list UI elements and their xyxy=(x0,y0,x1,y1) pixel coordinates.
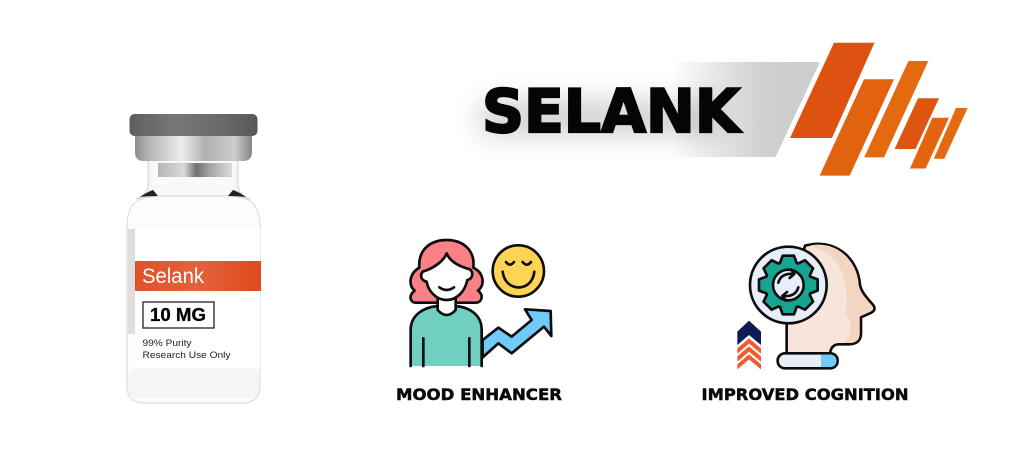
gear xyxy=(759,256,818,314)
vial dark cap xyxy=(130,114,258,136)
vial orange band xyxy=(135,261,261,291)
smile xyxy=(439,287,454,290)
neck xyxy=(438,298,456,315)
vial: Selank 10 MG xyxy=(127,114,261,403)
base collar xyxy=(778,353,838,368)
vial dose box: 10 MG xyxy=(150,305,206,325)
label: improved cognition: IMPROVED COGNITION xyxy=(702,385,908,404)
icon: head with gear and up chevrons xyxy=(737,244,875,369)
head xyxy=(787,244,875,356)
face xyxy=(421,253,472,300)
title banner xyxy=(480,62,820,157)
smiley xyxy=(493,245,544,297)
chevrons xyxy=(737,321,761,369)
hair xyxy=(411,240,483,303)
head shading xyxy=(810,245,872,343)
label: mood enhancer: MOOD ENHANCER xyxy=(396,385,562,404)
gear hub xyxy=(773,270,804,300)
title shadow xyxy=(480,100,720,136)
vial research use text: Research Use Only xyxy=(142,350,231,361)
sleeve lines xyxy=(423,338,469,366)
vial purity text: 99% Purity xyxy=(142,338,192,349)
vial base xyxy=(128,368,259,398)
gear circle xyxy=(750,247,827,323)
body xyxy=(411,306,482,366)
orange slanted bars xyxy=(790,43,968,176)
vial label xyxy=(135,227,260,368)
vial shoulder shadows xyxy=(140,190,246,197)
vial inner stopper band xyxy=(158,163,232,177)
vial name: Selank xyxy=(142,265,204,288)
vial silver crimp xyxy=(135,135,252,161)
grey banner band xyxy=(670,62,820,157)
vial glass neck xyxy=(136,158,250,199)
icon: woman with smile and rising arrow xyxy=(411,240,551,366)
vial label side strip xyxy=(128,229,135,334)
title text: SELANK xyxy=(482,77,742,147)
vial body xyxy=(127,196,260,403)
vial dose box xyxy=(143,302,214,328)
arrow xyxy=(483,309,551,357)
refresh arrows xyxy=(778,269,798,301)
